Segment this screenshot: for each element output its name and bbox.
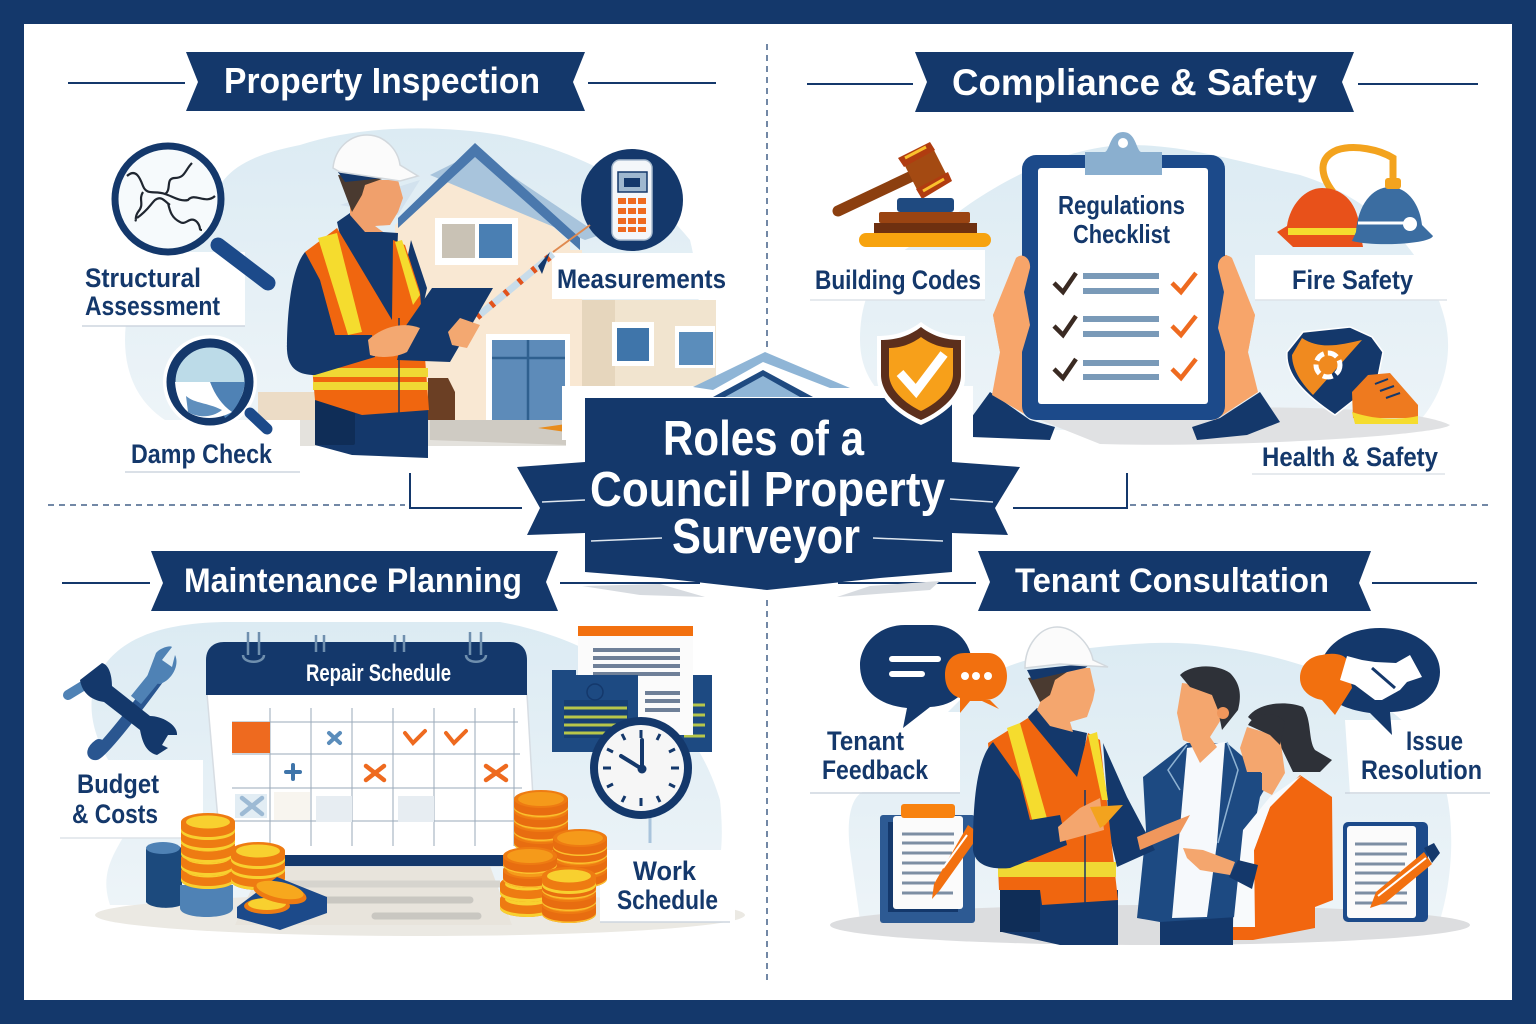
hard hat — [1025, 627, 1108, 668]
left arm — [973, 742, 1067, 868]
calendar rings — [243, 632, 486, 662]
head — [1037, 668, 1095, 732]
panel: property inspection — [60, 52, 732, 472]
white label panels — [805, 250, 1450, 475]
head — [350, 180, 403, 232]
illustration background — [860, 145, 1448, 430]
clipboard: regulations checklist: Checklist — [1073, 219, 1170, 249]
heading: property inspection — [68, 52, 716, 111]
label: structural assessment: Assessment — [85, 291, 220, 321]
label: tenant feedback: Feedback — [822, 755, 929, 785]
person: man tenant — [1137, 666, 1270, 945]
label: work schedule: Work — [633, 856, 697, 886]
heading: property inspection: Property Inspection — [224, 60, 540, 101]
calendar: repair schedule — [206, 632, 537, 866]
collar — [1028, 708, 1087, 790]
icon: wrench and hammer — [68, 646, 177, 755]
illustration background — [91, 622, 722, 905]
house — [258, 143, 716, 445]
ground shadow — [120, 420, 566, 446]
ground shadow — [1040, 408, 1450, 445]
vest — [305, 228, 429, 415]
heading: maintenance planning — [62, 551, 700, 611]
icon: crack magnifier — [115, 146, 268, 283]
measuring rod — [477, 225, 590, 317]
laptop base under calendar — [235, 866, 512, 925]
hand backs — [992, 255, 1035, 420]
ground shadow — [830, 905, 1470, 945]
label: budget and costs — [60, 769, 205, 838]
right arm — [1103, 743, 1155, 867]
checklist rows — [1054, 273, 1196, 378]
panel: compliance and safety — [805, 52, 1478, 475]
cuffs — [971, 392, 1280, 440]
calendar: repair schedule: Repair Schedule — [306, 660, 451, 687]
title text: Roles of a — [663, 412, 865, 466]
label: building codes: Building Codes — [815, 265, 981, 295]
label: tenant feedback — [810, 726, 960, 793]
hands — [1058, 798, 1104, 842]
banner body — [585, 398, 952, 590]
icon: clock — [594, 721, 688, 843]
title text: Council Property — [590, 463, 945, 517]
thumbs — [993, 256, 1030, 352]
icon: measuring device — [581, 149, 683, 251]
panel: tenant consultation — [810, 551, 1490, 945]
label: work schedule: Schedule — [617, 885, 718, 915]
label: issue resolution: Resolution — [1361, 755, 1482, 785]
icon: gavel — [838, 142, 991, 247]
label: damp check: Damp Check — [131, 439, 273, 469]
label: measurements: Measurements — [557, 264, 726, 294]
label: work schedule — [600, 856, 730, 922]
calendar marks — [242, 731, 506, 814]
roof above banner — [693, 352, 850, 397]
label: tenant feedback: Tenant — [827, 726, 904, 756]
trousers — [315, 400, 428, 458]
white label panels — [60, 760, 735, 922]
ribbon wings — [517, 462, 1020, 535]
title text — [590, 412, 945, 564]
collar and shirt — [337, 213, 398, 322]
white label panels — [60, 252, 300, 472]
label: issue resolution — [1345, 726, 1490, 793]
label: structural assessment: Structural — [85, 263, 201, 293]
label: structural assessment — [82, 263, 245, 326]
illustration background — [849, 643, 1451, 920]
right sleeve — [395, 240, 427, 320]
label: budget and costs: & Costs — [72, 799, 158, 829]
icon: issue resolution speech bubbles — [1300, 628, 1440, 735]
heading: compliance and safety — [807, 52, 1478, 112]
illustration background — [125, 128, 699, 420]
worker — [287, 135, 493, 458]
ground shadow — [95, 894, 745, 936]
icon: damp magnifier — [163, 335, 267, 429]
label: measurements — [552, 253, 732, 299]
heading: compliance and safety: Compliance & Safety — [952, 62, 1317, 103]
icon: fire helmet — [1277, 148, 1433, 247]
shadows under banner — [582, 581, 940, 597]
icon: coin stacks right — [500, 790, 607, 923]
vest — [988, 718, 1118, 905]
clipboard — [397, 288, 493, 362]
person: surveyor — [973, 627, 1190, 945]
center title banner — [410, 352, 1127, 597]
clipboard: regulations checklist: Regulations — [1058, 190, 1185, 220]
title text: Surveyor — [672, 510, 860, 564]
hands — [368, 325, 420, 357]
heading: tenant consultation — [838, 551, 1477, 611]
icon: clipboard and pencil left — [880, 804, 980, 923]
label: fire safety: Fire Safety — [1292, 265, 1413, 295]
hard hat — [333, 135, 418, 181]
icon: coin stacks left — [146, 813, 327, 930]
heading: tenant consultation: Tenant Consultation — [1015, 562, 1329, 600]
left arm — [287, 252, 375, 375]
icon: health and safety shield with shoe — [1287, 327, 1418, 424]
label: budget and costs: Budget — [77, 769, 159, 799]
white halo — [562, 386, 973, 462]
icon: document and pencil right — [1343, 822, 1440, 922]
icon: folder and documents — [552, 626, 712, 752]
label: health and safety: Health & Safety — [1262, 442, 1438, 472]
label: issue resolution: Issue — [1406, 726, 1463, 756]
heading: maintenance planning: Maintenance Planning — [184, 562, 522, 600]
icon: feedback speech bubbles — [860, 625, 1007, 728]
white label panels — [810, 712, 1490, 794]
person: woman tenant — [1183, 703, 1333, 940]
connector lines — [410, 473, 1127, 508]
panel: maintenance planning — [60, 551, 745, 936]
clipboard: regulations checklist — [971, 132, 1280, 440]
icon: shield with check — [877, 322, 965, 425]
